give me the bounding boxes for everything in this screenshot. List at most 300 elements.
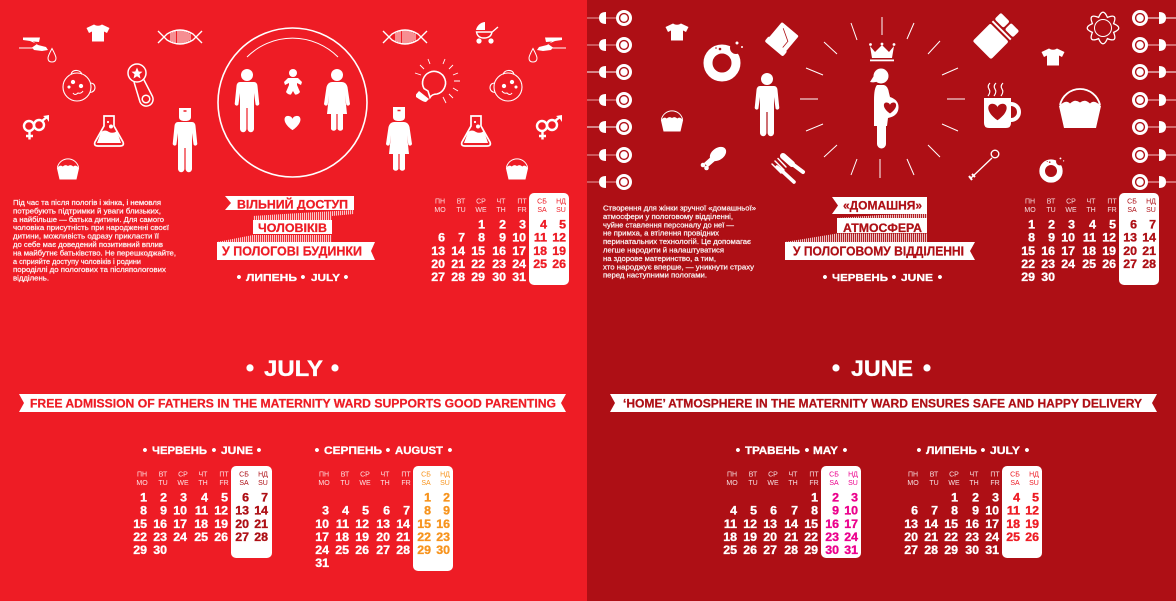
heading: July label: • (237, 268, 242, 284)
calendar: June bottom left: 18 (194, 517, 208, 531)
calendar: June top right: ПН (1025, 198, 1035, 206)
heading: July small label: • (917, 442, 922, 458)
calendar: June top right: 18 (1082, 244, 1096, 258)
calendar: May: 28 (784, 543, 798, 557)
calendar: June bottom left: 2 (160, 490, 167, 504)
calendar: July bottom right: TH (969, 480, 979, 487)
text block: right description: чуйне ставлення персоналу до неї — (603, 221, 734, 229)
calendar: July bottom right: 24 (985, 530, 999, 544)
banner: fathers admission: FREE ADMISSION OF FATHERS IN THE MATERNITY WARD SUPPORTS GOOD PARENTING (30, 396, 556, 410)
heading: big June: JUNE (851, 356, 913, 381)
calendar: May: MO (726, 480, 738, 487)
heading: July label: • (301, 268, 306, 284)
calendar: August: 12 (355, 517, 369, 531)
calendar: August: 16 (436, 517, 450, 531)
calendar: May: 4 (730, 504, 737, 518)
heading: June small label: • (257, 442, 262, 458)
calendar: June bottom left (133, 466, 272, 558)
heading: big July: JULY (264, 356, 323, 381)
icon: gift box (973, 13, 1019, 59)
text block: left description: Під час та після пологів і жінка, і немовля (13, 199, 161, 207)
calendar: August: FR (401, 480, 411, 487)
icon: basket left (57, 159, 79, 180)
heading: August small label: • (448, 442, 453, 458)
calendar: June top right: 2 (1048, 218, 1055, 232)
heading: right ribbon title: «ДОМАШНЯ» (843, 198, 922, 212)
calendar: June top right: 25 (1082, 257, 1096, 271)
calendar: July top left: TU (456, 207, 466, 214)
calendar: July top left: 1 (478, 218, 485, 232)
heading: July small label: • (981, 442, 986, 458)
heading: May small label: MAY (813, 445, 839, 457)
icon: sunburst rays (800, 17, 965, 178)
calendar: June top right: 14 (1142, 230, 1156, 244)
text block: right description: хто народжує вперше, — уникнути страху (603, 264, 755, 271)
calendar: June top right: 9 (1048, 230, 1055, 244)
calendar: August: 19 (355, 530, 369, 544)
calendar: June bottom left: 4 (201, 490, 208, 504)
calendar: June top right: 17 (1061, 244, 1075, 258)
calendar: July top left: СР (476, 198, 486, 206)
heading: June small label: ЧЕРВЕНЬ (152, 445, 207, 457)
heading: July small label (917, 442, 1030, 458)
calendar: June bottom left: 5 (221, 490, 228, 504)
calendar: June top right: TU (1046, 207, 1056, 214)
text block: left description: дитини, можливість одразу прикласти її (13, 233, 159, 241)
text block: right description (603, 204, 756, 280)
icon: sun (1087, 12, 1119, 44)
calendar: June bottom left: 7 (261, 490, 268, 504)
calendar: May: 8 (811, 504, 818, 518)
calendar: June top right: НД (1146, 198, 1156, 206)
calendar: July bottom right: 3 (992, 490, 999, 504)
calendar: May: 9 (832, 504, 839, 518)
calendar: August: 5 (362, 504, 369, 518)
calendar: August: 28 (396, 543, 410, 557)
calendar: July bottom right: ПТ (990, 472, 1000, 478)
calendar: July bottom right: 15 (944, 517, 958, 531)
text block: left description: чоловіка присутність при народженні своєї (13, 224, 169, 232)
banner: home atmosphere: ‘HOME’ ATMOSPHERE IN THE MATERNITY WARD ENSURES SAFE AND HAPPY DELIVERY (623, 396, 1142, 410)
calendar: June top right: 10 (1061, 230, 1075, 244)
calendar: June top right: 22 (1021, 257, 1035, 271)
calendar: June bottom left: 13 (235, 504, 249, 518)
calendar: June top right: 28 (1142, 257, 1156, 271)
calendar: June top right: MO (1024, 207, 1036, 214)
calendar: May: FR (809, 480, 819, 487)
calendar: July top left: 10 (512, 230, 526, 244)
calendar: June bottom left: FR (219, 480, 229, 487)
calendar: June bottom left: 30 (153, 543, 167, 557)
calendar: May: TH (788, 480, 798, 487)
calendar: July bottom right: 19 (1025, 517, 1039, 531)
calendar: July top left: 21 (451, 257, 465, 271)
calendar: June bottom left: 15 (133, 517, 147, 531)
calendar: May: SA (829, 480, 839, 487)
icon: large donut (708, 42, 743, 77)
icon: t-shirt right panel left (666, 24, 688, 40)
heading: July label: ЛИПЕНЬ (246, 272, 298, 284)
calendar: June top right: ЧТ (1087, 198, 1096, 206)
icon: gender symbols right (537, 115, 562, 140)
calendar: August: ВТ (341, 472, 350, 478)
calendar: May: 11 (724, 517, 737, 531)
calendar: July top left: 9 (499, 230, 506, 244)
calendar: May: 3 (851, 490, 858, 504)
calendar: July bottom right: 5 (1032, 490, 1039, 504)
calendar: May: 15 (804, 517, 818, 531)
text block: left description: на майбутнє батьківство. Не перешкоджайте, (13, 249, 176, 257)
calendar: July top left: ПТ (517, 198, 527, 206)
calendar: July top left: 14 (451, 244, 465, 258)
calendar: May: СР (768, 472, 778, 478)
text block: left description: породіллі до пологових та післяпологових (13, 266, 167, 274)
icon: bear left (63, 70, 95, 101)
calendar: July bottom right: 20 (904, 530, 918, 544)
calendar: June bottom left: СР (178, 472, 188, 478)
icon: towels stack (764, 21, 800, 57)
calendar: August: СБ (421, 472, 431, 478)
icon: t-shirt right panel right (1042, 48, 1064, 66)
calendar: June top right (1021, 193, 1159, 285)
icon: large basket (1059, 89, 1101, 128)
calendar: May: 17 (844, 517, 858, 531)
heading: big July (246, 354, 339, 382)
calendar: May: НД (848, 472, 858, 478)
calendar: July bottom right: 4 (1013, 490, 1020, 504)
calendar: July top left: 28 (451, 270, 465, 284)
calendar: August: 18 (335, 530, 349, 544)
calendar: June top right: 11 (1083, 230, 1096, 244)
calendar: June top right: 21 (1142, 244, 1156, 258)
calendar: June top right: 3 (1068, 218, 1075, 232)
calendar: May: 2 (832, 490, 839, 504)
calendar: May: ЧТ (789, 472, 798, 478)
calendar: August: SU (440, 480, 450, 487)
calendar: July bottom right: FR (990, 480, 1000, 487)
calendar: July top left: ПН (435, 198, 445, 206)
calendar: July bottom right: MO (907, 480, 919, 487)
panel: right dark red background (587, 0, 1176, 601)
calendar: June top right: 29 (1021, 270, 1035, 284)
calendar: July top left (431, 193, 569, 285)
calendar: August: 31 (315, 556, 329, 570)
heading: June label: • (892, 268, 897, 284)
calendar: August: TU (340, 480, 350, 487)
calendar: July bottom right: СР (949, 472, 959, 478)
calendar: August: 25 (335, 543, 349, 557)
calendar: July bottom right: 21 (924, 530, 938, 544)
heading: May small label (736, 442, 848, 458)
calendar: July bottom right: SA (1010, 480, 1020, 487)
calendar: June top right: ВТ (1047, 198, 1056, 206)
icon: stroller (476, 22, 498, 44)
heading: July label (237, 268, 349, 284)
heading: July small label: • (1025, 442, 1030, 458)
calendar: August: 29 (417, 543, 431, 557)
calendar: May: WE (767, 480, 779, 487)
calendar: August: 20 (376, 530, 390, 544)
calendar: August: СР (360, 472, 370, 478)
calendar: June bottom left: MO (136, 480, 148, 487)
calendar: May: 5 (750, 504, 757, 518)
calendar: July bottom right: ВТ (930, 472, 939, 478)
calendar: August: 4 (342, 504, 349, 518)
heading: June label: JUNE (901, 272, 933, 284)
icon: t-shirt (86, 24, 110, 42)
heading: left ribbon title: ЧОЛОВІКІВ (258, 221, 327, 235)
heading: August small label (315, 442, 453, 458)
text block: right description: перед наступними пологами. (603, 273, 707, 280)
heading: August small label: СЕРПЕНЬ (324, 445, 382, 457)
heading: May small label: • (843, 442, 848, 458)
calendar: June bottom left: 9 (160, 504, 167, 518)
calendar: July top left: 20 (431, 257, 445, 271)
heading: left ribbon title (217, 196, 375, 260)
calendar: July top left: SA (537, 207, 547, 214)
calendar: June bottom left: 10 (173, 504, 187, 518)
calendar: July top left: 31 (512, 270, 526, 284)
calendar: August: НД (440, 472, 450, 478)
text block: right description: Створення для жінки зручної «домашньої» (603, 204, 756, 212)
calendar: August: 23 (436, 530, 450, 544)
calendar: May: ПТ (809, 472, 819, 478)
calendar: July bottom right: 31 (985, 543, 999, 557)
calendar: August: 8 (424, 504, 431, 518)
calendar: July bottom right: 23 (965, 530, 979, 544)
icon: mug with heart (984, 83, 1019, 128)
calendar: June bottom left: 28 (254, 530, 268, 544)
text block: right description: легше народити й налаштуватися (603, 246, 724, 254)
calendar: June top right: 8 (1028, 230, 1035, 244)
calendar: June top right: SA (1127, 207, 1137, 214)
calendar: June bottom left: 27 (235, 530, 249, 544)
icon: rattle (128, 64, 153, 106)
calendar: July top left: 23 (492, 257, 506, 271)
calendar: June top right: 19 (1102, 244, 1116, 258)
calendar: July top left: СБ (537, 198, 547, 206)
heading: July small label: ЛИПЕНЬ (926, 445, 977, 457)
heading: June label: • (938, 268, 943, 284)
calendar: July top left: 30 (492, 270, 506, 284)
icon: gender symbols left (24, 115, 49, 140)
calendar: June top right: 4 (1089, 218, 1096, 232)
calendar: July top left: MO (434, 207, 446, 214)
calendar: July top left: TH (496, 207, 506, 214)
calendar: May: 29 (804, 543, 818, 557)
calendar: July bottom right: 13 (904, 517, 918, 531)
heading: big June: • (923, 354, 931, 382)
calendar: May: 26 (743, 543, 757, 557)
calendar: August: 13 (376, 517, 390, 531)
icon: pregnant woman (870, 68, 899, 148)
calendar: June bottom left: 1 (140, 490, 147, 504)
calendar: June bottom left: 6 (242, 490, 249, 504)
calendar: July bottom right: WE (948, 480, 960, 487)
calendar: June bottom left: НД (258, 472, 268, 478)
icon: syringe left (19, 38, 56, 62)
calendar: May: СБ (829, 472, 839, 478)
calendar: May: 19 (743, 530, 757, 544)
calendar: August: 27 (376, 543, 390, 557)
heading: July label: JULY (311, 272, 340, 284)
calendar: May: 23 (825, 530, 839, 544)
icon: crown (869, 43, 895, 61)
calendar: July top left: 15 (471, 244, 485, 258)
calendar: June bottom left: SU (258, 480, 268, 487)
calendar: June top right: FR (1107, 207, 1117, 214)
text block: left description: до себе має доведений позитивний вплив (13, 241, 163, 249)
calendar: August: 14 (396, 517, 410, 531)
calendar: August: 30 (436, 543, 450, 557)
calendar: June top right: 16 (1041, 244, 1055, 258)
heading: big June: • (832, 354, 840, 382)
calendar: June bottom left: WE (177, 480, 189, 487)
calendar: August: 26 (355, 543, 369, 557)
calendar: July bottom right: НД (1029, 472, 1039, 478)
calendar: June bottom left: ЧТ (199, 472, 208, 478)
calendar: August: MO (318, 480, 330, 487)
calendar: August: 7 (403, 504, 410, 518)
calendar: August: 6 (383, 504, 390, 518)
icon: key (969, 150, 999, 180)
icon: dna left (158, 30, 202, 44)
calendar: June bottom left: 20 (235, 517, 249, 531)
heading: left ribbon title: У ПОЛОГОВІ БУДИНКИ (222, 244, 362, 258)
heading: right ribbon title: У ПОЛОГОВОМУ ВІДДІЛЕННІ (793, 244, 964, 258)
calendar: July bottom right: 1 (951, 490, 958, 504)
calendar: May: 14 (784, 517, 798, 531)
calendar: July bottom right: 17 (985, 517, 999, 531)
calendar: June bottom left: 11 (195, 504, 208, 518)
calendar: July top left: НД (556, 198, 566, 206)
heading: big July: • (246, 354, 254, 382)
calendar: July top left: 6 (438, 230, 445, 244)
icon: dna right (383, 30, 427, 44)
icon: small donut (1042, 157, 1064, 180)
calendar: May: 30 (825, 543, 839, 557)
calendar: July bottom right: 8 (951, 504, 958, 518)
calendar: June top right: 5 (1109, 218, 1116, 232)
calendar: July bottom right: 27 (904, 543, 918, 557)
calendar: August: 17 (315, 530, 329, 544)
calendar: July top left: FR (517, 207, 527, 214)
text block: left description: відділень. (13, 275, 49, 283)
heading: June label (823, 268, 943, 284)
heading: August small label: • (386, 442, 391, 458)
text block: left description (13, 199, 176, 283)
icon: basket right (506, 159, 528, 180)
calendar: July bottom right: TU (929, 480, 939, 487)
calendar: May: 1 (811, 490, 818, 504)
icon: chicken leg (701, 144, 729, 170)
text block: right description: не примха, а втілення провідних (603, 230, 720, 238)
calendar: June bottom left: 21 (254, 517, 268, 531)
text block: left description: потребують підтримки й уваги близьких, (13, 207, 161, 215)
text block: right description: на здорове материнство, а тим, (603, 256, 716, 263)
calendar: August: 21 (396, 530, 410, 544)
calendar: June top right: 20 (1123, 244, 1137, 258)
calendar: June top right: TH (1086, 207, 1096, 214)
text block: left description: а сприяйте доступу чоловіків і родини (13, 258, 141, 266)
calendar: June bottom left: 29 (133, 543, 147, 557)
calendar: June bottom left: 8 (140, 504, 147, 518)
calendar: June top right: 1 (1028, 218, 1035, 232)
calendar: June bottom left: 26 (214, 530, 228, 544)
calendar: July bottom right: 29 (944, 543, 958, 557)
icon: light bulb with rays (415, 59, 460, 103)
calendar: May (723, 466, 861, 558)
heading: right ribbon title (785, 197, 975, 260)
icon: syringe right (529, 38, 566, 62)
calendar: May: 25 (723, 543, 737, 557)
calendar: August: 3 (322, 504, 329, 518)
calendar: May: 22 (804, 530, 818, 544)
panel: left red background (0, 0, 587, 601)
calendar: July top left: 18 (533, 244, 547, 258)
calendar: June bottom left: SA (239, 480, 249, 487)
calendar: June bottom left: 17 (173, 517, 187, 531)
calendar: July top left: SU (556, 207, 566, 214)
calendar: June top right: ПТ (1107, 198, 1117, 206)
calendar: July top left: 7 (458, 230, 465, 244)
calendar: June top right: 27 (1123, 257, 1137, 271)
calendar: July bottom right: ЧТ (970, 472, 979, 478)
heading: June small label: • (143, 442, 148, 458)
icon: screws left column (587, 10, 632, 190)
calendar: July top left: 25 (533, 257, 547, 271)
calendar: June top right: СБ (1127, 198, 1137, 206)
calendar: May: ВТ (749, 472, 758, 478)
calendar: July top left: ЧТ (497, 198, 506, 206)
calendar: May: 10 (844, 504, 858, 518)
calendar: July bottom right: 9 (972, 504, 979, 518)
calendar: June bottom left: 25 (194, 530, 208, 544)
icon: screws right column (1132, 10, 1176, 190)
heading: June small label (143, 442, 262, 458)
calendar: June top right: 23 (1041, 257, 1055, 271)
heading: May small label: ТРАВЕНЬ (745, 445, 800, 457)
calendar: July top left: 22 (471, 257, 485, 271)
heading: August small label: AUGUST (395, 445, 443, 457)
calendar: July top left: 16 (492, 244, 506, 258)
calendar: May: ПН (727, 472, 737, 478)
calendar: May: 31 (844, 543, 858, 557)
calendar: July bottom right: СБ (1010, 472, 1020, 478)
calendar: June bottom left: СБ (239, 472, 249, 478)
calendar: July bottom right: 10 (985, 504, 999, 518)
calendar: July top left: 24 (512, 257, 526, 271)
text block: left description: а найбільше — батька дитини. Для самого (13, 216, 164, 224)
calendar: May: 6 (770, 504, 777, 518)
calendar: June bottom left: 16 (153, 517, 167, 531)
calendar: May: 27 (763, 543, 777, 557)
calendar: July top left: 3 (519, 218, 526, 232)
calendar: June top right: 30 (1041, 270, 1055, 284)
calendar: July bottom right: 14 (924, 517, 938, 531)
icon: fork and knife (772, 156, 803, 182)
calendar: July top left: 19 (552, 244, 566, 258)
calendar: June top right: 12 (1102, 230, 1116, 244)
heading: June label: ЧЕРВЕНЬ (832, 272, 888, 284)
calendar: June bottom left: 14 (254, 504, 268, 518)
calendar: August: 22 (417, 530, 431, 544)
calendar: May: 12 (743, 517, 757, 531)
calendar: August: WE (359, 480, 371, 487)
icon: female nurse (386, 107, 412, 171)
calendar: July bottom right: 25 (1006, 530, 1020, 544)
calendar: July bottom right: 26 (1025, 530, 1039, 544)
